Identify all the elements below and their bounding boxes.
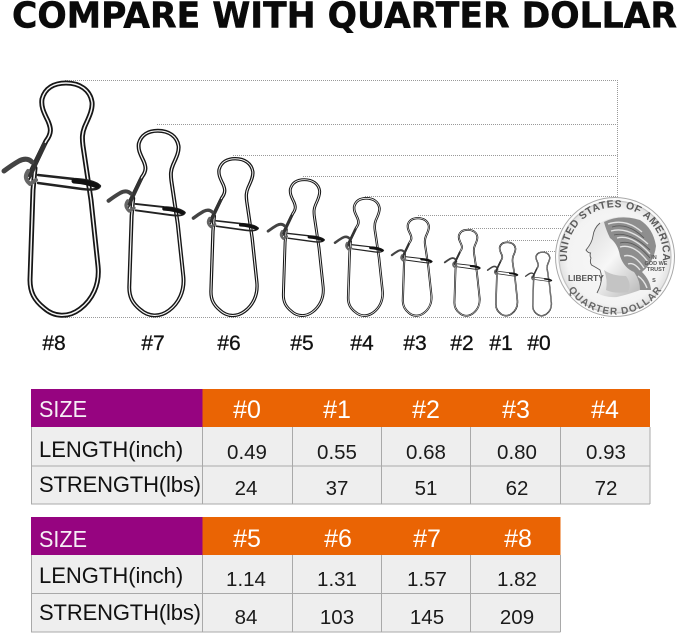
size labels: #2	[450, 332, 474, 355]
size labels: #4	[350, 332, 374, 355]
quarter dollar coin: QUARTER DOLLAR	[570, 287, 662, 315]
size labels: #7	[141, 332, 165, 355]
fishing snap clip #3	[392, 218, 432, 316]
size labels: #8	[42, 332, 66, 355]
table 1 body: 0.55	[317, 441, 357, 464]
table 1 body: STRENGTH(lbs)	[39, 472, 201, 497]
table 1 header: #4	[591, 396, 619, 424]
size labels	[42, 332, 551, 355]
table 2 body	[31, 555, 560, 632]
fishing snap clip #1	[488, 242, 518, 316]
table 1 body: 51	[415, 477, 437, 500]
table 2 body: 1.14	[226, 568, 266, 591]
table 2 body: 103	[320, 606, 354, 629]
table 1 header: #0	[233, 396, 261, 424]
table 2 body: 1.82	[497, 568, 537, 591]
table 1 header: #1	[323, 396, 351, 424]
table 1 body: 72	[595, 477, 617, 500]
quarter dollar coin: S	[652, 278, 656, 284]
size labels: #3	[403, 332, 427, 355]
table 2 body: LENGTH(inch)	[39, 563, 183, 588]
quarter dollar coin: LIBERTY	[568, 273, 604, 283]
fishing snap clip #4	[335, 198, 384, 316]
size labels: #0	[527, 332, 551, 355]
table 1 header: #3	[502, 396, 530, 424]
coin portrait	[586, 217, 656, 297]
table 2: sizes 5 to 8	[31, 517, 560, 632]
table 2 header: #8	[504, 525, 532, 553]
fishing snap clip #0	[526, 252, 552, 316]
table 1 body	[31, 427, 650, 504]
quarter dollar coin: TRUST	[647, 267, 666, 273]
table 1 body: 0.68	[406, 441, 446, 464]
table 2 header: #6	[324, 525, 352, 553]
table 2 header	[31, 517, 560, 555]
fishing snap clip #6	[193, 159, 258, 316]
table 1 header: #2	[412, 396, 440, 424]
quarter dollar coin	[555, 197, 675, 317]
table 1 header	[31, 389, 650, 427]
table 1 body: 0.80	[497, 441, 537, 464]
table 2 body: 1.31	[317, 568, 357, 591]
table 1 body: LENGTH(inch)	[39, 437, 183, 462]
table 2 body: 1.57	[407, 568, 447, 591]
table 1 header: SIZE	[39, 396, 87, 422]
fishing snap clip #5	[268, 180, 324, 316]
fishing snap clip #7	[109, 131, 185, 315]
size labels: #6	[217, 332, 241, 355]
fishing snap clip #8	[4, 83, 100, 315]
table 2 header: #5	[233, 525, 261, 553]
dotted guide lines	[65, 80, 618, 318]
size labels: #1	[489, 332, 513, 355]
quarter dollar coin: GOD WE	[645, 261, 668, 267]
table 1: sizes 0 to 4	[31, 389, 650, 504]
table 1 body: 62	[506, 477, 528, 500]
table 2 body: 209	[500, 606, 534, 629]
quarter dollar coin: IN	[651, 255, 657, 261]
table 1 body: 0.49	[227, 441, 267, 464]
table 2 body: STRENGTH(lbs)	[39, 600, 201, 625]
table 2 body: 145	[410, 606, 444, 629]
size labels: #5	[290, 332, 314, 355]
table 1 body: 0.93	[586, 441, 626, 464]
fishing snap clip #2	[445, 230, 480, 316]
coin inscriptions: UNITED STATES OF AMERICA	[560, 200, 670, 262]
table 1 body: 24	[235, 477, 257, 500]
table 2 header: SIZE	[39, 526, 87, 552]
table 1 body: 37	[326, 477, 348, 500]
table 2 header: #7	[413, 525, 441, 553]
table 2 body: 84	[235, 606, 257, 629]
